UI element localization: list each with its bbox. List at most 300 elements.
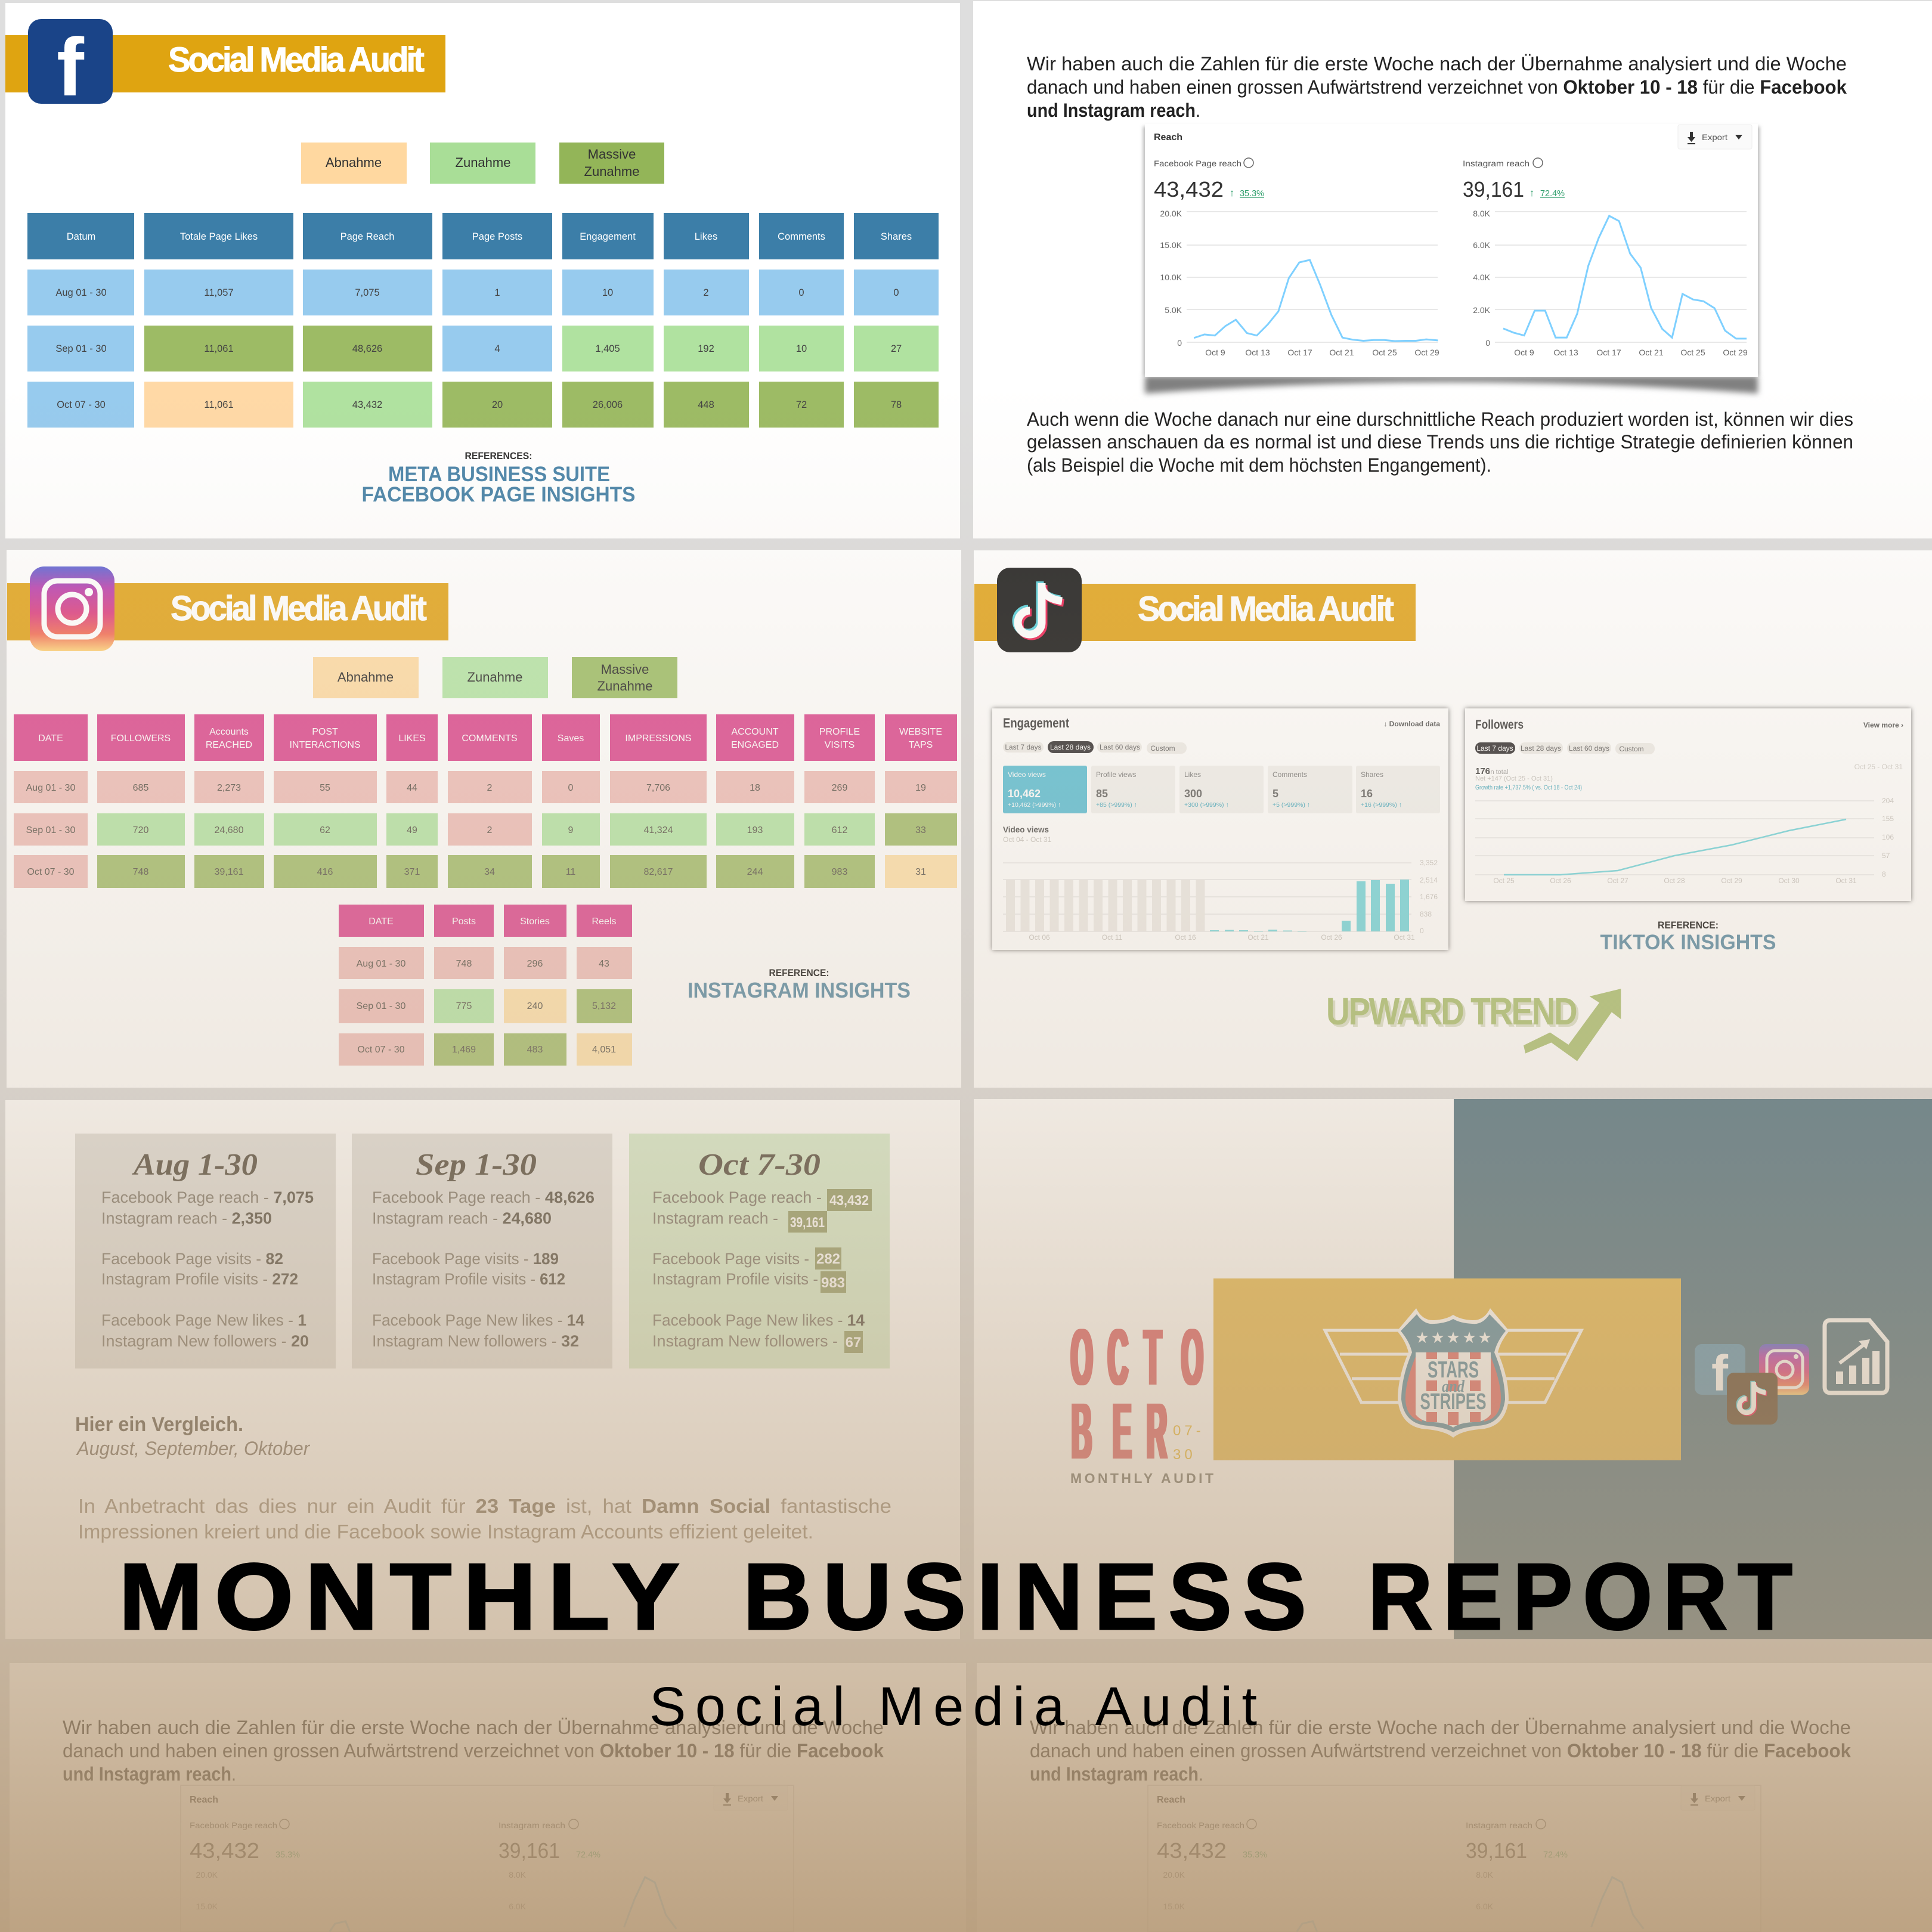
banner: TikTok Social Media Audit [974,568,1416,652]
line chart: followers: 204 [1882,797,1894,805]
table: Instagram metrics [14,714,957,888]
card: Oct 7-30: Instagram reach - [652,1209,778,1227]
references: Facebook: REFERENCES: [465,450,532,462]
banner: Instagram Social Media Audit: Social Media Audit [171,589,427,628]
left chart: Facebook reach: 0 [1177,338,1182,348]
line chart: followers: Oct 27 [1607,877,1628,885]
card: Oct 7-30: Instagram Profile visits - [652,1270,818,1288]
banner: Instagram Social Media Audit [7,566,448,651]
content row: Aug: Aug 01 - 30 [357,959,405,969]
table header row: WEBSITE [899,727,942,737]
export button: Export [1702,132,1727,142]
content row: Aug: 296 [527,959,543,969]
table row: Oct: 244 [747,867,763,877]
table row: Aug: 0 [568,783,574,793]
table row: Sep: 4 [494,343,500,354]
paragraph: reach note, right copy [1030,1717,1851,1785]
bar chart: video views: Oct 04 - Oct 31 [1003,835,1052,844]
content row: Aug [339,947,632,979]
table row: Sep: 48,626 [352,343,382,354]
table row: Sep: 10 [796,343,807,354]
card: Oct 7-30: Oct 7-30 [698,1148,821,1182]
paragraph: upward trend note: Wir haben auch die Zahlen für die erste Woche nach der Übernahme analysiert und die Woche [1027,53,1847,75]
table header row: DATE [38,733,63,744]
card: Oct 7-30: Facebook Page reach - [652,1188,822,1206]
right chart: Instagram reach: Oct 9 [1514,348,1534,357]
table row: Sep: 1,405 [595,343,620,354]
table row: Sep: 612 [832,825,847,835]
chart card: reach, left copy: 8.0K [509,1870,527,1880]
chart card: reach, left copy [181,1785,794,1932]
card: Oct 7-30: Facebook Page New likes - 14 [652,1311,865,1329]
period pills: Last 60 days [1569,744,1609,753]
bar chart: video views: Video views [1003,825,1049,834]
card: Aug 1-30: Aug 1-30 [132,1148,258,1182]
legend: Zunahme [467,670,522,685]
content row: Aug: 43 [599,959,609,969]
table row: Sep: 62 [320,825,330,835]
logo: stars and stripes shield: STARS [1428,1357,1479,1383]
table row: Oct: Oct 07 - 30 [27,867,75,877]
icon: Facebook [1695,1344,1745,1401]
period pills [1003,741,1187,754]
icon: report document with chart [1825,1320,1887,1393]
chart card: reach, left copy: Export [738,1794,763,1803]
line chart: followers [1475,797,1894,885]
card: Aug 1-30: Instagram Profile visits - 272 [101,1270,298,1288]
table header row: Saves [558,733,584,744]
metric tiles: +5 (>999%) ↑ [1272,801,1310,809]
highlighted October values: 67 [846,1335,861,1351]
chart card: reach, right copy: Instagram reach [1466,1820,1532,1830]
chart card: reach, left copy: 43,432 [190,1838,259,1863]
table row: Aug: 2,273 [217,783,241,793]
metric tiles: Profile views [1096,770,1136,779]
metric tiles: 10,462 [1008,788,1041,800]
panel: TikTok audit [974,550,1932,1088]
bar chart: video views [1003,825,1438,942]
period pills: Last 7 days [1005,743,1042,751]
table row: Sep: 720 [133,825,148,835]
line chart: followers: Oct 31 [1835,877,1857,885]
table row: Oct: 748 [133,867,148,877]
table row: Aug: 55 [320,783,330,793]
card: Sep 1-30: Instagram reach - 24,680 [372,1209,552,1227]
content row: Sep: 775 [456,1001,472,1011]
left chart: Facebook reach: 15.0K [1160,240,1182,250]
table row: Sep: 24,680 [215,825,244,835]
logo: stars and stripes shield: STRIPES [1420,1389,1486,1414]
card: Sep 1-30 [352,1134,612,1368]
line chart: followers: Oct 29 [1721,877,1742,885]
metric tiles: 16 [1361,788,1373,800]
period pills: Last 60 days [1100,743,1140,751]
legend [301,143,664,184]
content row: Sep: 240 [527,1001,543,1011]
line chart: followers: Oct 25 [1493,877,1515,885]
panel: reach commentary and chart [973,1,1932,538]
table row: Aug: 44 [407,783,417,793]
table row: Oct: 448 [698,400,714,410]
table header row: VISITS [825,740,854,750]
line chart: followers: Oct 30 [1778,877,1800,885]
card: TikTok followers: Followers [1475,718,1524,732]
legend [313,657,677,698]
highlighted October values: 43,432 [829,1193,869,1209]
chart card: reach, right copy: Export [1705,1794,1730,1803]
highlighted October values: 39,161 [790,1215,825,1231]
card: Oct 7-30: Instagram New followers - [652,1332,838,1350]
table header row: COMMENTS [462,733,518,744]
main title: MONTHLY [119,1544,691,1649]
reference: TikTok [1600,919,1776,954]
table header row: INTERACTIONS [289,740,361,750]
period pills: Custom [1619,745,1644,753]
line chart: followers: 57 [1882,852,1890,860]
table header row: Page Posts [472,231,522,242]
table row: Aug: Aug 01 - 30 [26,783,75,793]
bar chart: video views: Oct 11 [1102,933,1123,942]
chart card: reach, right copy: 35.3% [1243,1850,1267,1860]
line chart: followers: Oct 28 [1664,877,1685,885]
line chart: followers: 155 [1882,815,1894,823]
table row: Sep: Sep 01 - 30 [55,343,107,354]
line chart: followers: 106 [1882,833,1894,841]
table row: Oct: 11,061 [204,400,234,410]
legend: Zunahme [456,155,510,170]
chart card: reach, left copy: Instagram reach [499,1820,565,1830]
bar chart: video views: Oct 06 [1029,933,1050,942]
right chart: Instagram reach: 72.4% [1540,188,1565,199]
table row: Oct [27,382,939,428]
table row: Aug: 0 [798,287,804,298]
metric tiles: 85 [1096,788,1108,800]
metric tiles: +85 (>999%) ↑ [1096,801,1137,809]
card: Sep 1-30: Facebook Page reach - 48,626 [372,1188,595,1206]
metric tiles: Shares [1361,770,1383,779]
card: Oct 7-30 [629,1134,890,1368]
left chart: Facebook reach [1154,158,1439,357]
left chart: Facebook reach: Facebook Page reach [1154,159,1241,168]
month title: October [1070,1313,1213,1486]
table header row: POST [312,727,338,737]
month title: October: 07- [1173,1423,1205,1439]
table header row: ACCOUNT [731,727,779,737]
reference: Instagram: REFERENCE: [769,967,829,979]
left chart: Facebook reach: Oct 13 [1245,348,1270,357]
card: Aug 1-30: Facebook Page reach - 7,075 [101,1188,314,1206]
right chart: Instagram reach: ↑ [1530,187,1534,199]
right chart: Instagram reach: Oct 21 [1639,348,1664,357]
card: Aug 1-30: Instagram reach - 2,350 [101,1209,272,1227]
chart card: reach, right copy: Facebook Page reach [1157,1820,1244,1830]
follower totals: Oct 25 - Oct 31 [1854,763,1903,771]
period pills [1475,742,1655,754]
reference: Instagram [688,967,911,1002]
paragraph: reach note, left copy: und Instagram reach. [63,1763,236,1785]
paragraph: audit summary: In Anbetracht das dies nur ein Audit für 23 Tage ist, hat Damn Social fantastische [78,1495,891,1517]
table row: Aug: 19 [915,783,926,793]
table row: Aug: 7,075 [355,287,380,298]
right chart: Instagram reach: 2.0K [1473,305,1491,315]
icon: Instagram [1759,1344,1809,1395]
card: TikTok engagement: ↓ Download data [1383,720,1440,728]
heading: comparison: Hier ein Vergleich. [75,1413,243,1436]
banner: TikTok Social Media Audit: Social Media Audit [1138,590,1394,628]
table header row [14,714,957,761]
table row: Sep: 11,061 [204,343,234,354]
table row: Sep: 33 [915,825,926,835]
chart card: reach, right copy: Reach [1157,1795,1185,1805]
table row: Aug: Aug 01 - 30 [55,287,107,298]
left chart: Facebook reach: 5.0K [1165,305,1182,315]
paragraph: reach note, right copy: und Instagram reach. [1030,1763,1203,1785]
card: Aug 1-30: Instagram New followers - 20 [101,1332,309,1350]
right chart: Instagram reach: Oct 29 [1723,348,1748,357]
bar chart: video views: 0 [1420,927,1424,935]
table header row: Datum [67,231,95,242]
paragraph: average reach note: Auch wenn die Woche danach nur eine durschnittliche Reach produziert worden ist, können wir dies [1027,408,1853,430]
table row: Oct: 78 [891,400,902,410]
left chart: Facebook reach: 10.0K [1160,273,1182,282]
table header row: Comments [778,231,825,242]
table row: Aug: 2 [703,287,709,298]
legend: Massive [588,147,636,162]
logo: stars and stripes shield: ★ [1478,1329,1492,1347]
chart card: reach: Reach [1154,132,1182,143]
card: Aug 1-30: Facebook Page visits - 82 [101,1250,283,1268]
main title: REPORT [1368,1544,1803,1649]
table header row: ENGAGED [731,740,779,750]
bar chart: video views: Oct 21 [1247,933,1269,942]
paragraph: audit summary [78,1495,891,1543]
follower totals: in total [1489,769,1508,776]
panel: repeated reach slide, right [977,1663,1932,1932]
table header row: FOLLOWERS [111,733,171,744]
table row: Aug: 11,057 [204,287,234,298]
table row: Oct: Oct 07 - 30 [57,400,106,410]
month title: October: BER [1072,1387,1167,1476]
table row: Aug: 2 [487,783,493,793]
banner: Facebook Social Media Audit: f [57,21,85,113]
content row: Oct: 4,051 [592,1045,616,1055]
table header row [27,213,939,259]
metric tiles: +16 (>999%) ↑ [1361,801,1402,809]
metric tiles: 300 [1184,788,1202,800]
table row: Sep: 193 [747,825,763,835]
table header row: Totale Page Likes [180,231,258,242]
table header row: Engagement [580,231,636,242]
content row: Sep: Sep 01 - 30 [357,1001,405,1011]
bar chart: video views: Oct 31 [1394,933,1415,942]
logo: stars and stripes shield: ★ [1431,1329,1445,1347]
card: TikTok followers: View more › [1863,721,1903,729]
chart card: reach, left copy: Reach [190,1795,218,1805]
gold logo panel [1213,1278,1681,1460]
card: TikTok engagement [992,708,1448,950]
table row: Sep [27,326,939,371]
legend: Abnahme [338,670,394,685]
content table header: Posts [452,917,476,927]
chart card: reach, left copy: 15.0K [196,1902,218,1911]
table row: Aug: 18 [750,783,760,793]
paragraph: upward trend note: und Instagram reach. [1027,100,1200,121]
references: Facebook: META BUSINESS SUITE [388,463,610,486]
line chart: followers: 8 [1882,870,1886,878]
card: Sep 1-30: Instagram Profile visits - 612 [372,1270,565,1288]
panel: Facebook audit table [5,3,960,538]
legend: Abnahme [326,155,382,170]
chart card: reach, right copy: 43,432 [1157,1838,1227,1863]
heading: comparison: August, September, Oktober [76,1438,310,1459]
content row: Sep [339,989,632,1023]
logo: stars and stripes shield: ★ [1462,1329,1476,1347]
chart card: reach, left copy: 72.4% [576,1850,600,1860]
paragraph: average reach note: (als Beispiel die Woche mit dem höchsten Engangement). [1027,454,1491,476]
right chart: Instagram reach: 0 [1485,338,1490,348]
right chart: Instagram reach: Instagram reach [1463,159,1530,168]
icon: Facebook: f [1711,1345,1729,1401]
chart card: reach, right copy: 39,161 [1466,1838,1527,1863]
chart card: reach, right copy: 6.0K [1476,1902,1494,1911]
table: Instagram content [339,905,632,1066]
reference: Instagram: INSTAGRAM INSIGHTS [688,978,911,1002]
table header row: IMPRESSIONS [625,733,692,744]
table row: Sep: 2 [487,825,493,835]
right chart: Instagram reach: 39,161 [1463,177,1524,202]
heading: comparison [75,1413,310,1459]
left chart: Facebook reach: ↑ [1230,187,1234,199]
banner: Facebook Social Media Audit: Social Media Audit [168,41,425,79]
table row: Sep: 41,324 [644,825,673,835]
month title: October: OCTO [1071,1313,1203,1402]
table row: Oct: 371 [404,867,420,877]
references: Facebook: FACEBOOK PAGE INSIGHTS [361,483,636,506]
table row: Oct: 26,006 [593,400,623,410]
table row: Aug [27,270,939,315]
paragraph: reach note, right copy: danach und haben einen grossen Aufwärtstrend verzeichnet von Oktober 10 - 18 für die Facebook [1030,1740,1851,1761]
follower totals: Net +147 (Oct 25 - Oct 31) [1475,775,1553,782]
right chart: Instagram reach: 6.0K [1473,240,1491,250]
month title: October: 30 [1173,1447,1196,1463]
paragraph: reach note, left copy: Wir haben auch die Zahlen für die erste Woche nach der Übernahme analysiert und die Woche [63,1717,884,1738]
panel: cover slide [974,1099,1932,1639]
chart card: reach, left copy: 35.3% [275,1850,300,1860]
chart card: reach, right copy [1148,1785,1761,1932]
paragraph: average reach note: gelassen anschauen da es normal ist und diese Trends uns die richtige Strategie definierien können [1027,431,1853,453]
table header row: Page Reach [340,231,394,242]
panel: monthly comparison [5,1100,960,1639]
main title: BUSINESS [743,1544,1317,1649]
content table header: Reels [592,917,616,927]
table row: Aug: 10 [602,287,613,298]
left chart: Facebook reach: Oct 21 [1329,348,1354,357]
table row: Aug [14,771,957,803]
bar chart: video views: Oct 26 [1321,933,1342,942]
table row: Sep: 27 [891,343,902,354]
left chart: Facebook reach: 20.0K [1160,209,1182,218]
legend: Zunahme [597,679,652,693]
table row: Sep: 9 [568,825,574,835]
content row: Oct: Oct 07 - 30 [357,1045,405,1055]
arrow: upward trend [1524,989,1621,1061]
icon: TikTok [1727,1373,1778,1425]
card: Sep 1-30: Facebook Page visits - 189 [372,1250,559,1268]
metric tiles: +10,462 (>999%) ↑ [1008,801,1061,809]
chart card: reach [1143,124,1760,394]
follower totals: 176 [1475,766,1490,776]
logo: stars and stripes shield: ★ [1415,1329,1429,1347]
period pills: Last 28 days [1521,744,1561,753]
table row: Sep: 192 [698,343,714,354]
chart card: reach, left copy: 6.0K [509,1902,527,1911]
table row: Oct: 20 [492,400,503,410]
table row: Sep: Sep 01 - 30 [26,825,75,835]
paragraph: upward trend note [1027,53,1847,121]
table row: Oct: 82,617 [644,867,673,877]
chart card: reach, right copy: 20.0K [1163,1870,1185,1880]
right chart: Instagram reach: Oct 17 [1596,348,1621,357]
line chart: followers: Oct 26 [1550,877,1571,885]
highlighted October values [788,1189,872,1353]
table row: Aug: 7,706 [646,783,670,793]
paragraph: reach note, right copy: Wir haben auch die Zahlen für die erste Woche nach der Übernahme analysiert und die Woche [1030,1717,1851,1738]
subtitle: Social Media Audit [649,1676,1257,1737]
table header row: Shares [881,231,912,242]
table row: Oct: 11 [566,867,575,877]
table row: Oct [14,855,957,888]
table row: Oct: 34 [484,867,495,877]
table header row: PROFILE [819,727,860,737]
right chart: Instagram reach: 8.0K [1473,209,1491,218]
logo: stars and stripes shield: and [1442,1377,1465,1396]
main title [119,1544,1803,1649]
panel: repeated reach slide, left [10,1663,966,1932]
chart card: reach, right copy: 8.0K [1476,1870,1494,1880]
card: Aug 1-30 [75,1134,336,1368]
left chart: Facebook reach: Oct 17 [1287,348,1312,357]
highlighted October values: 983 [821,1275,845,1291]
bar chart: video views: 2,514 [1420,876,1438,884]
reference: TikTok: REFERENCE: [1658,919,1719,931]
left chart: Facebook reach: Oct 25 [1372,348,1397,357]
table row: Sep [14,813,957,846]
content table header [339,905,632,937]
left chart: Facebook reach: 43,432 [1154,177,1224,202]
right chart: Instagram reach: Oct 25 [1680,348,1705,357]
chart card: reach, right copy: 15.0K [1163,1902,1185,1911]
table: Facebook metrics [27,213,939,428]
paragraph: reach note, left copy: danach und haben einen grossen Aufwärtstrend verzeichnet von Oktober 10 - 18 für die Facebook [63,1740,884,1761]
paragraph: audit summary: Impressionen kreiert und die Facebook sowie Instagram Accounts effizient geleitet. [78,1521,813,1543]
card: Sep 1-30: Sep 1-30 [416,1148,537,1182]
bar chart: video views: Oct 16 [1175,933,1196,942]
content table header: DATE [369,917,394,927]
table header row: Accounts [209,727,249,737]
period pills: Last 7 days [1476,744,1513,753]
card: Sep 1-30: Instagram New followers - 32 [372,1332,579,1350]
export button [1678,125,1752,149]
reference: TikTok: TIKTOK INSIGHTS [1600,931,1776,954]
table row: Aug: 1 [494,287,500,298]
logo: stars and stripes shield [1325,1308,1581,1438]
card: TikTok followers [1465,708,1911,901]
paragraph: upward trend note: danach und haben einen grossen Aufwärtstrend verzeichnet von Oktober 10 - 18 für die Facebook [1027,76,1847,98]
bar chart: video views: 3,352 [1420,859,1438,867]
card: Sep 1-30: Facebook Page New likes - 14 [372,1311,584,1329]
table row: Sep: 49 [407,825,417,835]
card: Oct 7-30: Facebook Page visits - [652,1250,809,1268]
